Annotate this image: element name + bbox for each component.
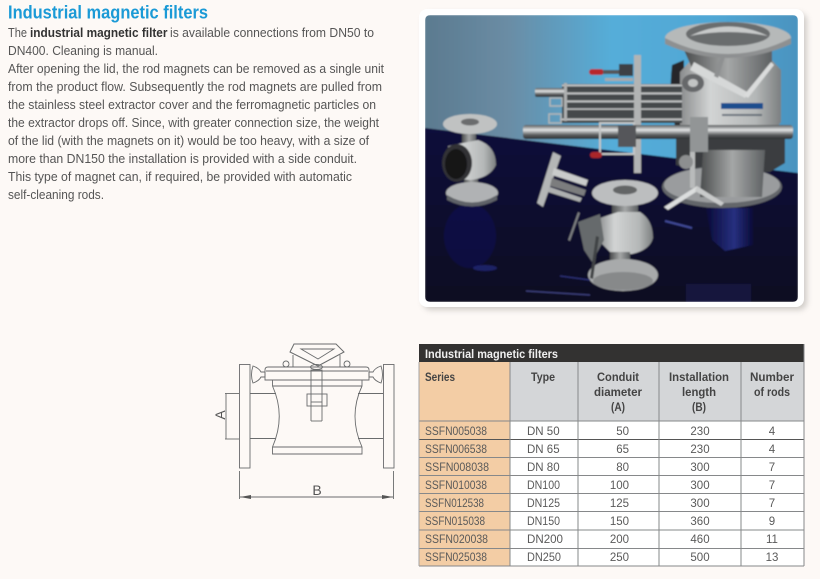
table rows: 150: [610, 516, 629, 528]
table header: Installation: [669, 370, 729, 384]
icon: large filter: [662, 22, 791, 251]
table rows: SSFN020038: [425, 534, 488, 546]
table rows: DN 50: [527, 426, 560, 438]
table rows: SSFN015038: [425, 516, 485, 528]
text block: description: industrial magnetic filter: [30, 26, 168, 40]
table rows: SSFN006538: [425, 444, 487, 456]
table rows: 200: [610, 534, 629, 546]
dimension A: [212, 394, 239, 439]
table rows: 50: [616, 426, 629, 438]
table header: Number: [750, 370, 794, 384]
table rows: 80: [616, 462, 629, 474]
icon: right flange: [384, 364, 394, 468]
table header: (B): [692, 400, 706, 414]
table rows: DN100: [527, 480, 560, 492]
table rows: 230: [690, 444, 710, 456]
table title bar: Industrial magnetic filters: [425, 347, 558, 361]
table header: of rods: [754, 385, 790, 399]
table rows: 4: [769, 444, 776, 456]
table rows: 9: [769, 516, 775, 528]
text block: description: is available connections from DN50 to: [170, 26, 374, 40]
table rows: 360: [690, 516, 710, 528]
text block: description: of the lid (with the magnets on it) would be too heavy, with a size of: [8, 134, 370, 148]
table rows: SSFN005038: [425, 426, 487, 438]
logo: [721, 103, 763, 109]
table: [419, 344, 804, 566]
table rows: 4: [769, 426, 776, 438]
text block: description: [8, 26, 385, 202]
icon: filter body: [250, 344, 383, 454]
table rows: 250: [610, 552, 629, 564]
icon: front filter: [526, 180, 751, 302]
table rows: DN125: [527, 498, 560, 510]
table rows: DN150: [527, 516, 560, 528]
table rows: 230: [690, 426, 710, 438]
table rows: 125: [610, 498, 629, 510]
dimension A: A: [212, 410, 228, 420]
table rows: [419, 344, 804, 566]
table header: diameter: [594, 385, 642, 399]
table rows: SSFN012538: [425, 498, 484, 510]
text block: description: This type of magnet can, if required, be provided with automatic: [8, 170, 352, 184]
table rows: DN250: [527, 552, 561, 564]
table header: length: [682, 385, 716, 399]
icon: small filter left: [442, 114, 498, 271]
table rows: 300: [690, 462, 710, 474]
table rows: DN 65: [527, 444, 560, 456]
table rows: SSFN008038: [425, 462, 489, 474]
text block: description: DN400. Cleaning is manual.: [8, 44, 158, 58]
table title bar: [419, 344, 804, 362]
table rows: DN200: [527, 534, 563, 546]
dimension B: [240, 471, 394, 499]
icon: small rod unit: [537, 152, 588, 207]
table header: (A): [611, 400, 625, 414]
icon: left flange: [240, 364, 250, 468]
text block: description: the stainless steel extractor cover and the ferromagnetic particles on: [8, 98, 376, 112]
table header: Type: [531, 370, 555, 384]
technical drawing: [212, 344, 394, 499]
text block: description: After opening the lid, the rod magnets can be removed as a single unit: [8, 62, 385, 76]
text block: description: more than DN150 the installation is provided with a side conduit.: [8, 152, 357, 166]
table rows: 300: [690, 498, 710, 510]
text block: description: self-cleaning rods.: [8, 188, 104, 202]
table rows: 13: [766, 552, 778, 564]
text block: description: The: [8, 26, 27, 40]
table rows: 460: [690, 534, 710, 546]
text block: description: the extractor drops off. Since, with greater connection size, the weight: [8, 116, 379, 130]
table rows: 100: [610, 480, 629, 492]
icon: rod magnet assembly: [523, 55, 793, 173]
table rows: 7: [769, 462, 775, 474]
dimension B: B: [312, 482, 322, 498]
table rows: 7: [769, 498, 775, 510]
panel: product photo: [419, 9, 807, 310]
table header: [419, 362, 804, 421]
table rows: 65: [616, 444, 629, 456]
table rows: SSFN010038: [425, 480, 487, 492]
table rows: DN 80: [527, 462, 560, 474]
table rows: 300: [690, 480, 710, 492]
text block: description: from the product flow. Subsequently the rod magnets are pulled from: [8, 80, 382, 94]
table rows: 11: [766, 534, 778, 546]
table rows: 7: [769, 480, 775, 492]
table rows: 500: [690, 552, 710, 564]
table rows: SSFN025038: [425, 552, 487, 564]
table header: Conduit: [597, 370, 639, 384]
table header: Series: [425, 370, 455, 384]
title: Industrial magnetic filters: [8, 2, 208, 22]
